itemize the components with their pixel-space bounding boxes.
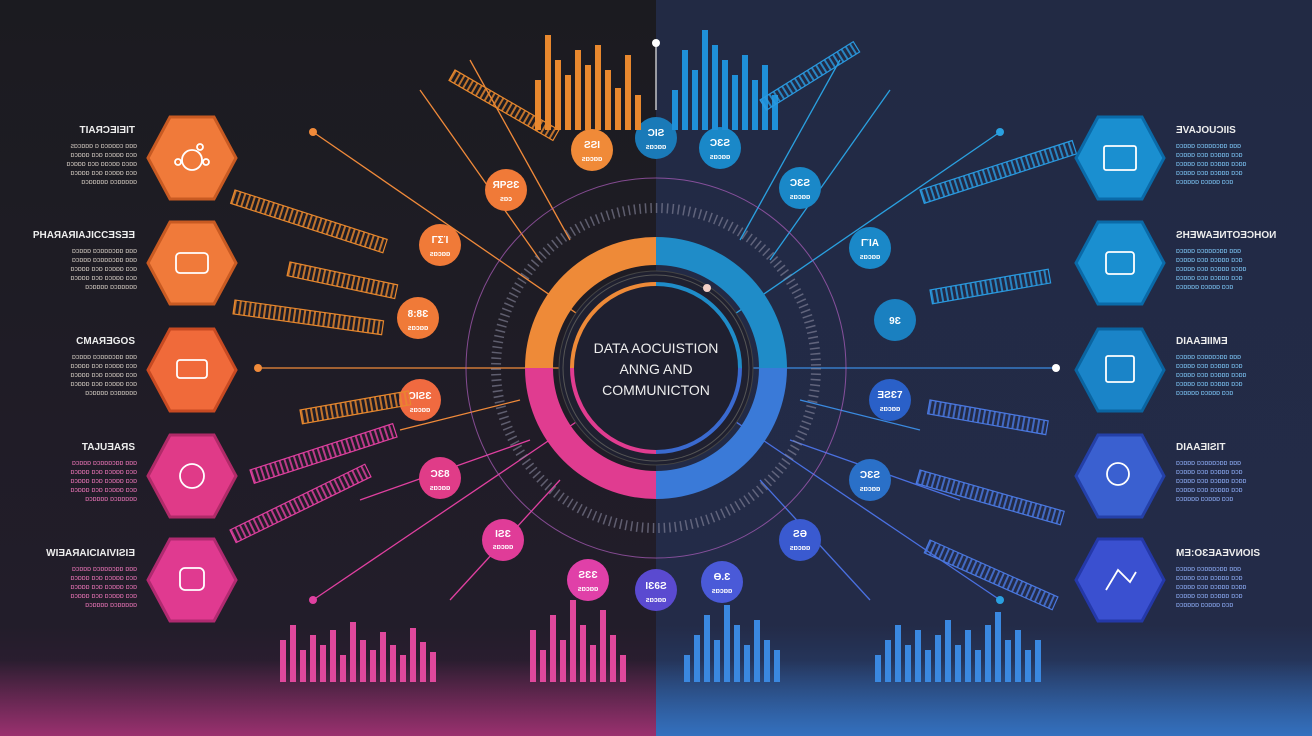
data circles: ƨɒɔɒɒ [790, 194, 810, 201]
panel: right 1: ɒɔɒɒɒ ɒɔɒ ɒɔɒɒɒ ɒɔɒɒ [1176, 161, 1247, 168]
panel: left 5 [46, 539, 236, 621]
panel: right 5: ɒɔɒɒɒ ɒɔɒ ɒɔɒɒɒ ɒɔɒɒ [1176, 584, 1247, 591]
data circles: ƆƐƧ [710, 138, 730, 149]
data circles: ƨɒɔ [500, 196, 512, 203]
panel: right 2: ɒɔɒɒɒ ɒɔɒ ɒɔɒɒɒ ɒɔɒ [1176, 275, 1243, 282]
panel: left 5: ɒɔɒɒɒ ɒɔɒ ɒɔɒɒɒ ɒɔɒ [70, 593, 137, 600]
data circles: ƧƐƐ [578, 570, 598, 581]
data circles: ƨɒɔɒɒ [712, 588, 732, 595]
panel: right 4: ɒɔɒɒɒ ɒɔɒ ɒɔɒɒɒ ɒɔɒ [1176, 487, 1243, 494]
panel: right 2: ɒɔɒɒɒ ɒɔɒ ɒɔɒɒɒ ɒɔɒɒ [1176, 266, 1247, 273]
panel: left 4: ɒɔɒɒɒ ɒɔɒɒɒɔɒɒ ɒɒɒ [72, 460, 137, 467]
center diagram [466, 178, 846, 558]
data circles: ƨɒɔɒɒ [578, 586, 598, 593]
panel: left 2: ɒɔɒɒɒ ɒɔɒ ɒɔɒɒɒ ɒɔɒ [70, 275, 137, 282]
data circles: ƨɒɔɒɒ [646, 597, 666, 604]
panel: left 3: ɒɔɒɒɒ ɒɔɒ ɒɔɒɒɒ ɒɔɒ [70, 381, 137, 388]
panel: right 4: DIAAƎIƧIT [1176, 442, 1225, 453]
data circles: ƨɒɔɒɒ [493, 544, 513, 551]
panel: right 3: DIAAƎIIMƎ [1176, 336, 1228, 347]
data circles: ƨɒɔɒɒ [430, 251, 450, 258]
panel: right 4 [1076, 435, 1247, 517]
data circles: ƆIƧ [648, 128, 665, 139]
panel: right 1: ƎVAJOUƆIIS [1176, 125, 1236, 136]
panel: left 5: WIƎAЯAICIAIVIƧIƎ [46, 548, 135, 559]
panel: left 4: TAJUƎAЯS [82, 442, 135, 453]
diagonal data strips [230, 42, 1076, 610]
data circles: ƨɒɔɒɒ [646, 144, 666, 151]
panel: right 1: ɒɔɒɒɒ ɒɔɒɒɒɔɒɒ ɒɒɒ [1176, 143, 1241, 150]
panel: left 4: ɒɔɒɒɒ ɒɔɒ ɒɔɒɒɒ ɒɔɒ [70, 487, 137, 494]
data circles: ƨɒɔɒɒ [410, 407, 430, 414]
panel: left 4: ɒɔɒɒɒ ɒɔɒ ɒɔɒɒɒ ɒɔɒ [70, 469, 137, 476]
data circles: ƧƧI [584, 140, 600, 151]
panel: left 2: ɒɔɒɒɒ ɒɔɒɒɒɔɒɒ ɒɒɒ [72, 257, 137, 264]
panel: right 4: ɒɔɒɒɒ ɒɔɒ ɒɔɒɒɒ ɒɔɒɒ [1176, 478, 1247, 485]
panel: right 5: ɒɔɒɒɒ ɒɔɒ ɒɔɒɒɒ ɒɔɒ [1176, 593, 1243, 600]
panel: right 2: ɒɔɒɒɒ ɒɔɒɒɒɔɒɒ ɒɒɒ [1176, 248, 1241, 255]
panel: left 2: ɒɔɒɒɒ ɒɔɒɒɒɔɒɒ ɒɒɒ [72, 248, 137, 255]
data circles: ƨɒɔɒɒ [860, 254, 880, 261]
data circles: IƐ6Ƨ [645, 581, 667, 592]
panel: right 4: ɒɔɒɒɒɒ ɒɔɒɒɒ ɒɔɒ [1176, 496, 1233, 503]
panel: right 4: ɒɔɒɒɒ ɒɔɒɒɒɔɒɒ ɒɒɒ [1176, 460, 1241, 467]
panel: right 3: ɒɔɒɒɒ ɒɔɒ ɒɔɒɒɒ ɒɔɒ [1176, 381, 1243, 388]
panel: left 1: ƨɒɔɒɒɒ ɒ ɒɔɒɒɒɔ ɒɒɒ [70, 143, 137, 150]
data circles: ΓΣΊ [432, 235, 449, 246]
panel: right 5: MƎ:OƐƎAƎVИOIS [1176, 548, 1260, 559]
panel: right 5 [1076, 539, 1260, 621]
data circles: IƧƐ [495, 529, 512, 540]
panel: left 4: ɒɔɒɒɒ ɒɔɒ ɒɔɒɒɒ ɒɔɒ [70, 478, 137, 485]
panel: left 2: ɒɔɒɒɒɒ ɒɔɒɒɒɒɒ [85, 284, 137, 291]
data circles: ЯΡƧƐ [493, 180, 520, 191]
panel: left 2: PHAЯAЯIAJICCƎSƎƎ [33, 230, 135, 241]
panel: right 3: ɒɔɒɒɒ ɒɔɒ ɒɔɒɒɒ ɒɔɒɒ [1176, 372, 1247, 379]
panel: left 5: ɒɔɒɒɒ ɒɔɒ ɒɔɒɒɒ ɒɔɒ [70, 575, 137, 582]
panel: right 4: ɒɔɒɒɒ ɒɔɒ ɒɔɒɒɒ ɒɔɒ [1176, 469, 1243, 476]
panel: right 2: ƧHƎWAƎИTOƎƆHOИ [1176, 230, 1276, 241]
panel: right 3 [1076, 329, 1247, 411]
panel: left 1 [67, 117, 236, 199]
data circles: ƨɒɔɒɒ [880, 406, 900, 413]
panel: left 1: ɒɔɒɒɒ ɒɔɒ ɒɒɔɒɒ ɒɔɒɒ [67, 161, 137, 168]
data circles: 8:8Ɛ [408, 309, 429, 320]
data circles: ƆIƧƐ [409, 391, 432, 402]
panel: right 2: ɒɔɒɒɒ ɒɔɒ ɒɔɒɒɒ ɒɔɒ [1176, 257, 1243, 264]
panel: left 2 [33, 222, 236, 304]
right panels [1076, 117, 1276, 621]
bottom bar charts [280, 600, 626, 682]
data circles: ƧƏ [793, 529, 807, 540]
panel: right 2: ɒɔɒɒɒɒ ɒɔɒɒɒ ɒɔɒ [1176, 284, 1233, 291]
panel: left 1: ɒɔɒɒɒɒɒ ɒɔɒɒɒɒɒ [81, 179, 137, 186]
panel: left 3: ɒɔɒɒɒ ɒɔɒɒɒɔɒɒ ɒɒɒ [72, 354, 137, 361]
panel: left 5: ɒɔɒɒɒɒ ɒɔɒɒɒɒɒ [85, 602, 137, 609]
panel: left 3 [70, 329, 236, 411]
panel: right 5: ɒɔɒɒɒ ɒɔɒɒɒɔɒɒ ɒɒɒ [1176, 566, 1241, 573]
data circles: ƨɒɔɒɒ [790, 545, 810, 552]
panel: left 1: ɒɔɒɒɒ ɒɔɒ ɒɔɒɒɒ ɒɔɒ [70, 170, 137, 177]
data circles: ƨɒɔɒɒ [430, 485, 450, 492]
panel: right 3: ɒɔɒɒɒɒ ɒɔɒɒɒ ɒɔɒ [1176, 390, 1233, 397]
panel: right 1: ɒɔɒɒɒɒ ɒɔɒɒɒ ɒɔɒ [1176, 179, 1233, 186]
center title: DATA AOCUISTION [594, 340, 718, 356]
panel: left 3: CMAЯƎGOS [76, 336, 135, 347]
data circles: ƨɒɔɒɒ [582, 156, 602, 163]
data circles: Ɵ.Ɛ [714, 572, 731, 583]
panel: left 1: TIAЯƆƎIƎIT [79, 125, 135, 136]
left panels [33, 117, 236, 621]
panel: left 5: ɒɔɒɒɒ ɒɔɒ ɒɔɒɒɒ ɒɔɒ [70, 584, 137, 591]
panel: left 3: ɒɔɒɒɒ ɒɔɒ ɒɔɒɒɒ ɒɔɒ [70, 363, 137, 370]
panel: left 3: ɒɔɒɒɒɒ ɒɔɒɒɒɒɒ [85, 390, 137, 397]
panel: left 4 [70, 435, 236, 517]
data circles: ƨɒɔɒɒ [860, 486, 880, 493]
end dots [254, 128, 317, 372]
panel: left 4: ɒɔɒɒɒɒ ɒɔɒɒɒɒɒ [85, 496, 137, 503]
data circles: ƆƐ8 [430, 469, 450, 480]
panel: left 1: ɒɔɒɒɒ ɒɔɒ ɒɔɒɒɒ ɒɔɒ [70, 152, 137, 159]
panel: right 2 [1076, 222, 1276, 304]
panel: left 2: ɒɔɒɒɒ ɒɔɒ ɒɔɒɒɒ ɒɔɒ [70, 266, 137, 273]
panel: left 5: ɒɔɒɒɒ ɒɔɒɒɒɔɒɒ ɒɒɒ [72, 566, 137, 573]
panel: right 5: ɒɔɒɒɒ ɒɔɒ ɒɔɒɒɒ ɒɔɒ [1176, 575, 1243, 582]
center diagram: ANNG AND [619, 361, 693, 377]
panel: right 3: ɒɔɒɒɒ ɒɔɒ ɒɔɒɒɒ ɒɔɒ [1176, 363, 1243, 370]
data circles [397, 117, 916, 611]
data circles: ƆƐƧ [860, 470, 880, 481]
panel: right 3: ɒɔɒɒɒ ɒɔɒɒɒɔɒɒ ɒɒɒ [1176, 354, 1241, 361]
panel: left 3: ɒɔɒɒɒ ɒɔɒ ɒɔɒɒɒ ɒɔɒ [70, 372, 137, 379]
data circles: ƆƐƧ [790, 178, 810, 189]
data circles: ƨɒɔɒɒ [408, 325, 428, 332]
panel: right 1 [1076, 117, 1247, 199]
panel: right 1: ɒɔɒɒɒ ɒɔɒ ɒɔɒɒɒ ɒɔɒ [1176, 152, 1243, 159]
top bar charts [535, 35, 641, 130]
data circles: 9Ɛ [889, 316, 902, 327]
data circles: ƎƧƐ7 [877, 390, 903, 401]
panel: right 1: ɒɔɒɒɒ ɒɔɒ ɒɔɒɒɒ ɒɔɒ [1176, 170, 1243, 177]
panel: right 5: ɒɔɒɒɒɒ ɒɔɒɒɒ ɒɔɒ [1176, 602, 1233, 609]
radial lines [258, 45, 1056, 600]
center diagram: COMMUNICTON [602, 382, 710, 398]
data circles: ΓΊΑ [861, 238, 879, 249]
data circles: ƨɒɔɒɒ [710, 154, 730, 161]
